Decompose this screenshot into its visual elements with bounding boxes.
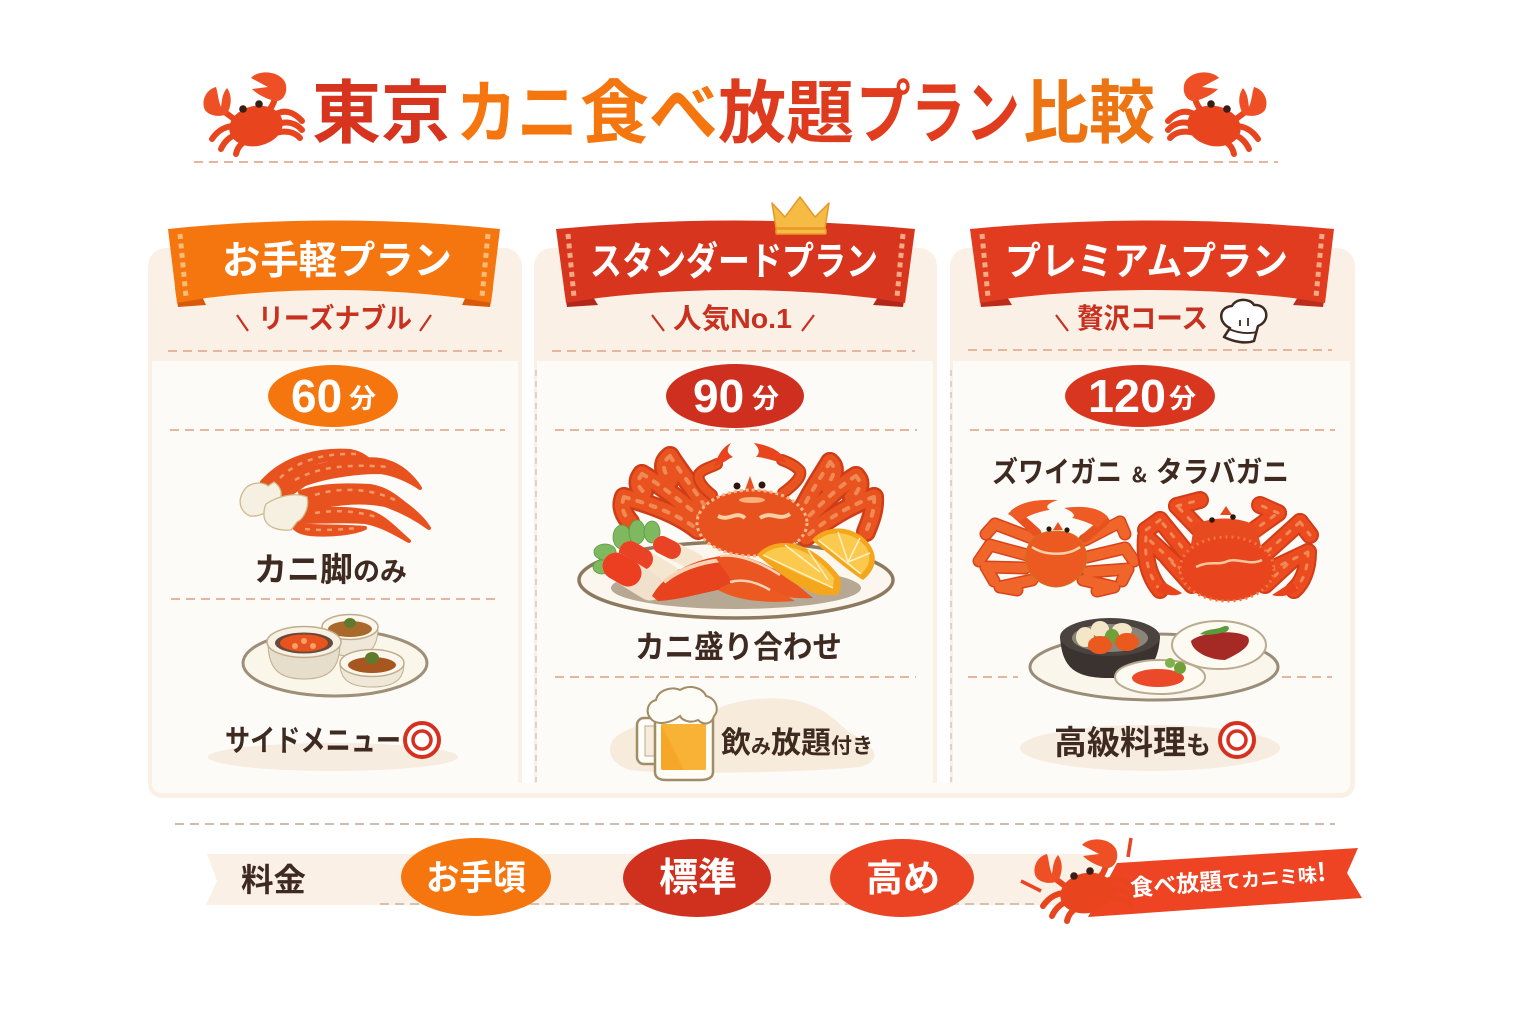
- pill: standard: [623, 839, 771, 917]
- title text: 食べ: [580, 57, 718, 157]
- ribbon header: プレミアムプラン: [1005, 241, 1288, 284]
- ribbon header: お手軽プラン: [222, 240, 452, 283]
- banner text: 食べ放題てカニミ味!: [1129, 853, 1327, 904]
- pill: higher: [830, 839, 974, 917]
- ribbon header: [168, 220, 500, 307]
- crab body: [744, 476, 756, 493]
- ribbon header: スタンダードプラン: [590, 241, 878, 284]
- time pill 60: 分: [349, 377, 376, 416]
- panel: light plan: [168, 220, 505, 771]
- king crab legs: [622, 456, 874, 537]
- title text: 東京: [312, 57, 450, 157]
- banner with crab: [1021, 838, 1362, 921]
- time pill 90: 分: [752, 377, 779, 416]
- pill: higher: 高め: [866, 848, 940, 902]
- illustration: king crab: [1146, 500, 1310, 601]
- illustration: luxury dishes plate: [1030, 618, 1278, 700]
- time pill 60: 60: [291, 370, 342, 422]
- lemons: [757, 543, 841, 595]
- label: crab platter: カニ盛り合わせ: [635, 622, 842, 667]
- crab meat pieces: [616, 545, 695, 587]
- pill: standard: 標準: [659, 847, 737, 903]
- time pill 60: [268, 365, 398, 427]
- ribbon header: [970, 220, 1334, 307]
- highlight label: luxury dishes: [1020, 716, 1280, 771]
- time pill 90: 90: [693, 370, 744, 422]
- time pill 120: 120: [1088, 370, 1166, 422]
- pill: affordable: [401, 838, 551, 916]
- title text: プラン: [856, 57, 1020, 157]
- icon: beer mug: [637, 687, 717, 780]
- illustration: crab legs: [240, 451, 429, 541]
- title: [194, 57, 1278, 162]
- highlight: all you can drink: 飲み放題付き: [721, 718, 873, 762]
- label: snow and king crab: タラバガニ: [1156, 449, 1289, 491]
- panel: standard plan: [552, 197, 917, 780]
- label: snow and king crab: ズワイガニ: [992, 449, 1122, 491]
- subtitle: 贅沢コース: [1077, 303, 1208, 334]
- illustration: snow crab: [979, 500, 1134, 591]
- title text: カニ: [456, 57, 578, 157]
- title text: [312, 57, 1155, 157]
- highlight label: side menu: サイドメニュー: [225, 716, 401, 760]
- label: price: 料金: [241, 855, 306, 901]
- time pill 90: [666, 364, 804, 428]
- price row: [206, 838, 1100, 917]
- label: snow and king crab: [992, 449, 1289, 491]
- pill: affordable: お手頃: [426, 850, 526, 901]
- label: snow and king crab: &: [1132, 459, 1147, 488]
- subtitle: 人気No.1: [673, 303, 792, 334]
- illustration: crab platter: [579, 443, 893, 618]
- icon: chef hat: [1221, 300, 1266, 342]
- time pill 120: 分: [1169, 377, 1196, 416]
- ribbon header: [556, 220, 915, 307]
- icon: crab left: [203, 72, 302, 154]
- highlight label: luxury dishes: 高級料理も: [1054, 716, 1211, 764]
- label: crab legs only: カニ脚のみ: [254, 543, 407, 591]
- highlight: all you can drink: [610, 687, 874, 780]
- icon: crab: [1034, 839, 1133, 921]
- icon: crown: [772, 197, 829, 234]
- panel: premium plan: [968, 220, 1335, 771]
- title text: 放題: [718, 57, 854, 157]
- greens: [593, 520, 660, 574]
- icon: crab right: [1168, 72, 1267, 154]
- panel backgrounds: [148, 248, 1355, 798]
- subtitle: リーズナブル: [258, 302, 412, 334]
- highlight label: side menu: [208, 716, 458, 771]
- title text: 比較: [1023, 57, 1155, 157]
- illustration: side dishes plate: [243, 614, 427, 696]
- time pill 120: [1065, 365, 1215, 427]
